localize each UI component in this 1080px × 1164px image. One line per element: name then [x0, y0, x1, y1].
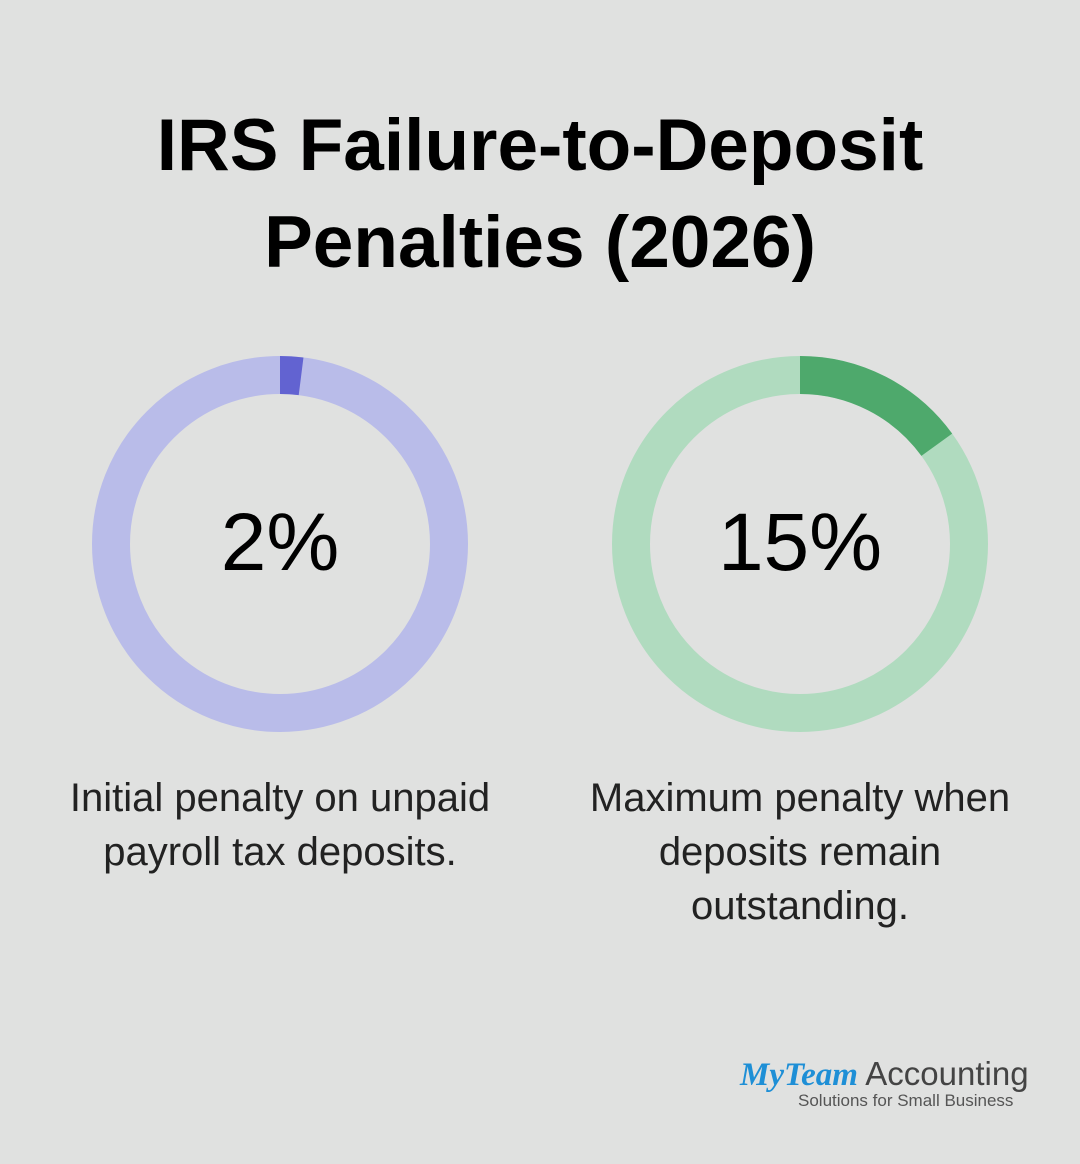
donut: 2%: [111, 375, 449, 713]
donut: 15%: [631, 375, 969, 713]
text: left description: Initial penalty on unpaid payroll tax deposits.: [70, 776, 490, 874]
logo: Solutions for Small Business: [798, 1091, 1013, 1110]
title: [157, 105, 923, 283]
title: Penalties (2026): [264, 202, 816, 283]
logo: [740, 1055, 1029, 1110]
donut charts: [92, 356, 988, 732]
text: right description: Maximum penalty when deposits remain outstanding.: [590, 776, 1010, 928]
donut: 2%: 2%: [221, 497, 339, 588]
title: IRS Failure-to-Deposit: [157, 105, 923, 186]
logo: MyTeam Accounting: [740, 1055, 1029, 1093]
donut: 15%: 15%: [718, 497, 882, 588]
